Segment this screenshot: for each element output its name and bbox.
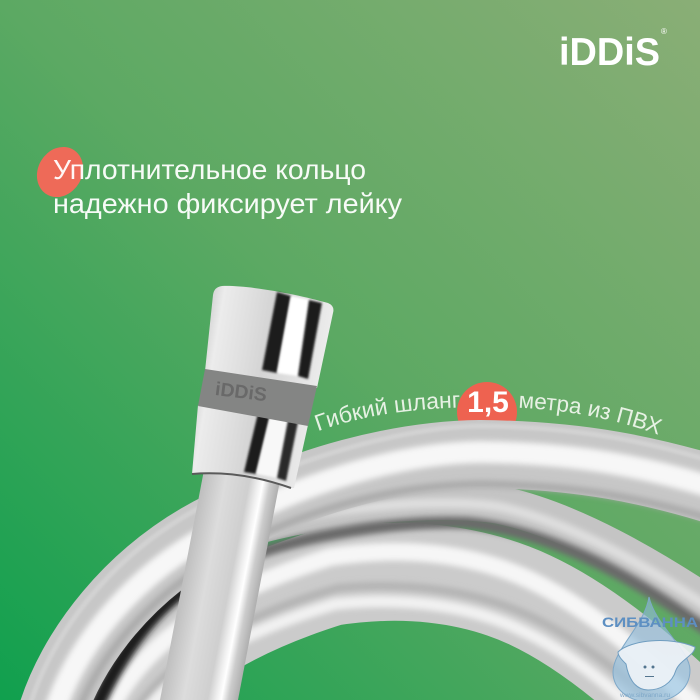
dark shadow band left bbox=[90, 585, 190, 700]
curved caption left: Гибкий шланг bbox=[314, 395, 460, 431]
bathtub bbox=[618, 641, 695, 690]
straight hose tube bbox=[160, 470, 282, 700]
value 1,5: 1,5 bbox=[467, 386, 509, 419]
grey ring bbox=[198, 369, 317, 426]
logo: iDDiS: iDDiS bbox=[559, 31, 660, 74]
callout: flexible hose 1.5 m bbox=[314, 382, 662, 435]
heading: sealing ring text with red accent bbox=[28, 138, 402, 219]
upper chrome sleeve bbox=[205, 286, 333, 388]
brand name: СИБВАННА bbox=[602, 614, 698, 630]
inner hose strand bbox=[110, 552, 700, 700]
logo: iDDiS: ® bbox=[661, 27, 667, 36]
heading text: надежно фиксирует лейку bbox=[53, 188, 402, 219]
curved caption right: метра из ПВХ bbox=[520, 396, 662, 435]
red circle bbox=[457, 382, 517, 442]
website: www.sibvanna.ru bbox=[619, 693, 670, 699]
outer hose strand bbox=[28, 426, 700, 700]
lower chrome sleeve bbox=[192, 405, 308, 488]
red accent blob bbox=[28, 138, 92, 206]
watermark: Sibvanna bbox=[602, 597, 698, 700]
hose coil bbox=[28, 426, 700, 700]
dark shadow band right bbox=[240, 523, 700, 640]
bathtub face bbox=[644, 666, 654, 677]
ring logo: iDDiS bbox=[214, 379, 268, 406]
middle hose strand bbox=[240, 501, 700, 622]
heading text: Уплотнительное кольцо bbox=[53, 154, 366, 185]
water drop bbox=[613, 597, 690, 700]
chrome fitting with grey ring bbox=[192, 286, 333, 488]
